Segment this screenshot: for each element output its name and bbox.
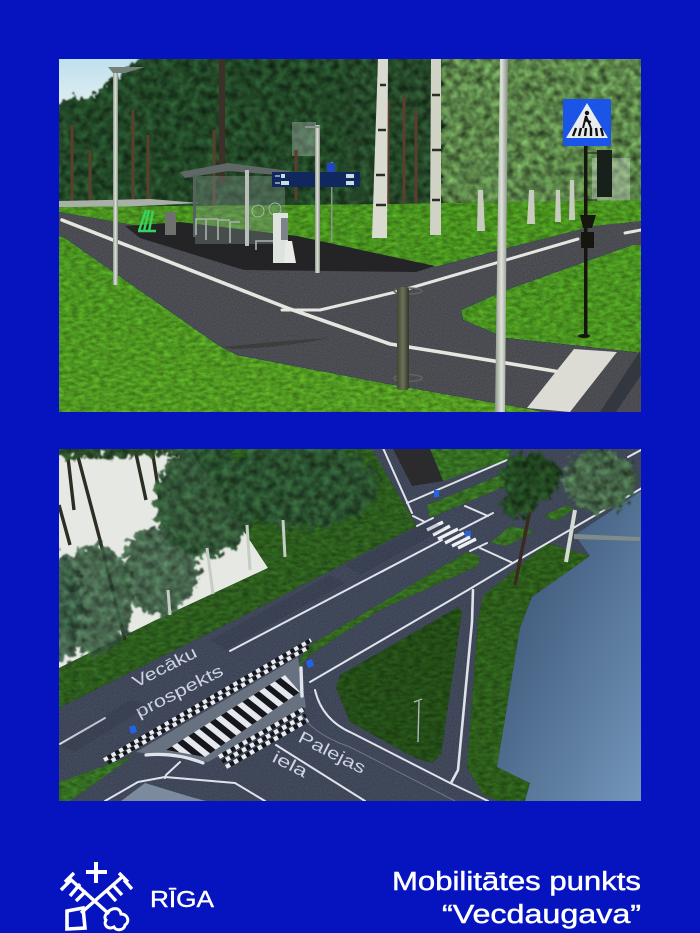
upper left grass verge xyxy=(59,449,417,708)
road text: Palejas iela: iela xyxy=(269,748,311,782)
upper lawn xyxy=(59,200,641,267)
road text: Palejas iela xyxy=(269,728,369,782)
bus shelter xyxy=(180,163,290,250)
road curb xyxy=(600,351,641,412)
logo wordmark: RĪGA: RĪGA xyxy=(150,886,215,912)
white bicycle lane markings xyxy=(62,220,641,372)
lower left lawn xyxy=(59,236,545,412)
ticket kiosk xyxy=(273,213,296,263)
road text: Vecāku prospekts: prospekts xyxy=(132,661,226,722)
lake jetty xyxy=(574,534,640,541)
road text: Palejas iela: Palejas xyxy=(295,728,369,778)
parking plaza xyxy=(393,449,443,486)
bottom shelter roof xyxy=(121,783,206,801)
bottom left grass tip xyxy=(59,755,135,801)
icon: cross xyxy=(86,862,107,883)
crosswalk far xyxy=(427,522,476,548)
blue bike symbols xyxy=(129,490,471,734)
right grass verge xyxy=(467,543,590,801)
icon: right key xyxy=(81,873,132,930)
white empty plot xyxy=(59,449,268,668)
panel: street-level render of mobility point xyxy=(59,59,641,412)
upper grass patches xyxy=(427,449,574,546)
white lane markings xyxy=(60,448,642,801)
road surface xyxy=(59,449,641,801)
checkered border lower xyxy=(219,709,308,767)
tactile paving strip xyxy=(527,349,617,412)
pedestrian crossing road sign xyxy=(563,99,612,338)
checkered border upper xyxy=(104,640,311,763)
title: Mobilitātes punkts xyxy=(392,868,641,896)
right lawn xyxy=(461,245,641,353)
road text: Vecāku prospekts xyxy=(129,643,226,722)
tall grey pole xyxy=(495,59,508,412)
water surface xyxy=(497,491,641,801)
road text: Vecāku prospekts: Vecāku xyxy=(129,643,200,692)
asphalt road xyxy=(59,212,641,412)
sky xyxy=(59,59,141,106)
icon: left key xyxy=(61,873,109,929)
pine tree right xyxy=(500,452,560,585)
birch and pine trees, left group xyxy=(30,420,378,665)
road shadows xyxy=(59,520,445,752)
logo: Riga crossed keys emblem xyxy=(61,862,132,930)
panel: aerial render of intersection xyxy=(59,449,641,801)
lamp post left xyxy=(108,67,145,285)
title xyxy=(392,868,641,929)
birch trunks xyxy=(372,59,575,238)
shadows on road xyxy=(222,338,330,349)
concrete crossing bands xyxy=(136,657,306,762)
grey curb lines xyxy=(300,712,455,801)
waste bin xyxy=(165,212,176,235)
bollard xyxy=(394,287,422,390)
green scooters xyxy=(138,210,156,231)
small lamp on island xyxy=(414,699,422,742)
forest background xyxy=(59,59,641,243)
title: “Vecdaugava” xyxy=(442,901,641,929)
triangle grass island xyxy=(336,607,462,763)
middle grass strip xyxy=(298,552,480,668)
birch tree right xyxy=(564,448,636,562)
wayfinding sign on pole xyxy=(272,125,360,273)
far gravel path xyxy=(59,199,200,207)
dark plaza under shelter xyxy=(125,222,435,272)
zebra crossing xyxy=(166,675,300,757)
